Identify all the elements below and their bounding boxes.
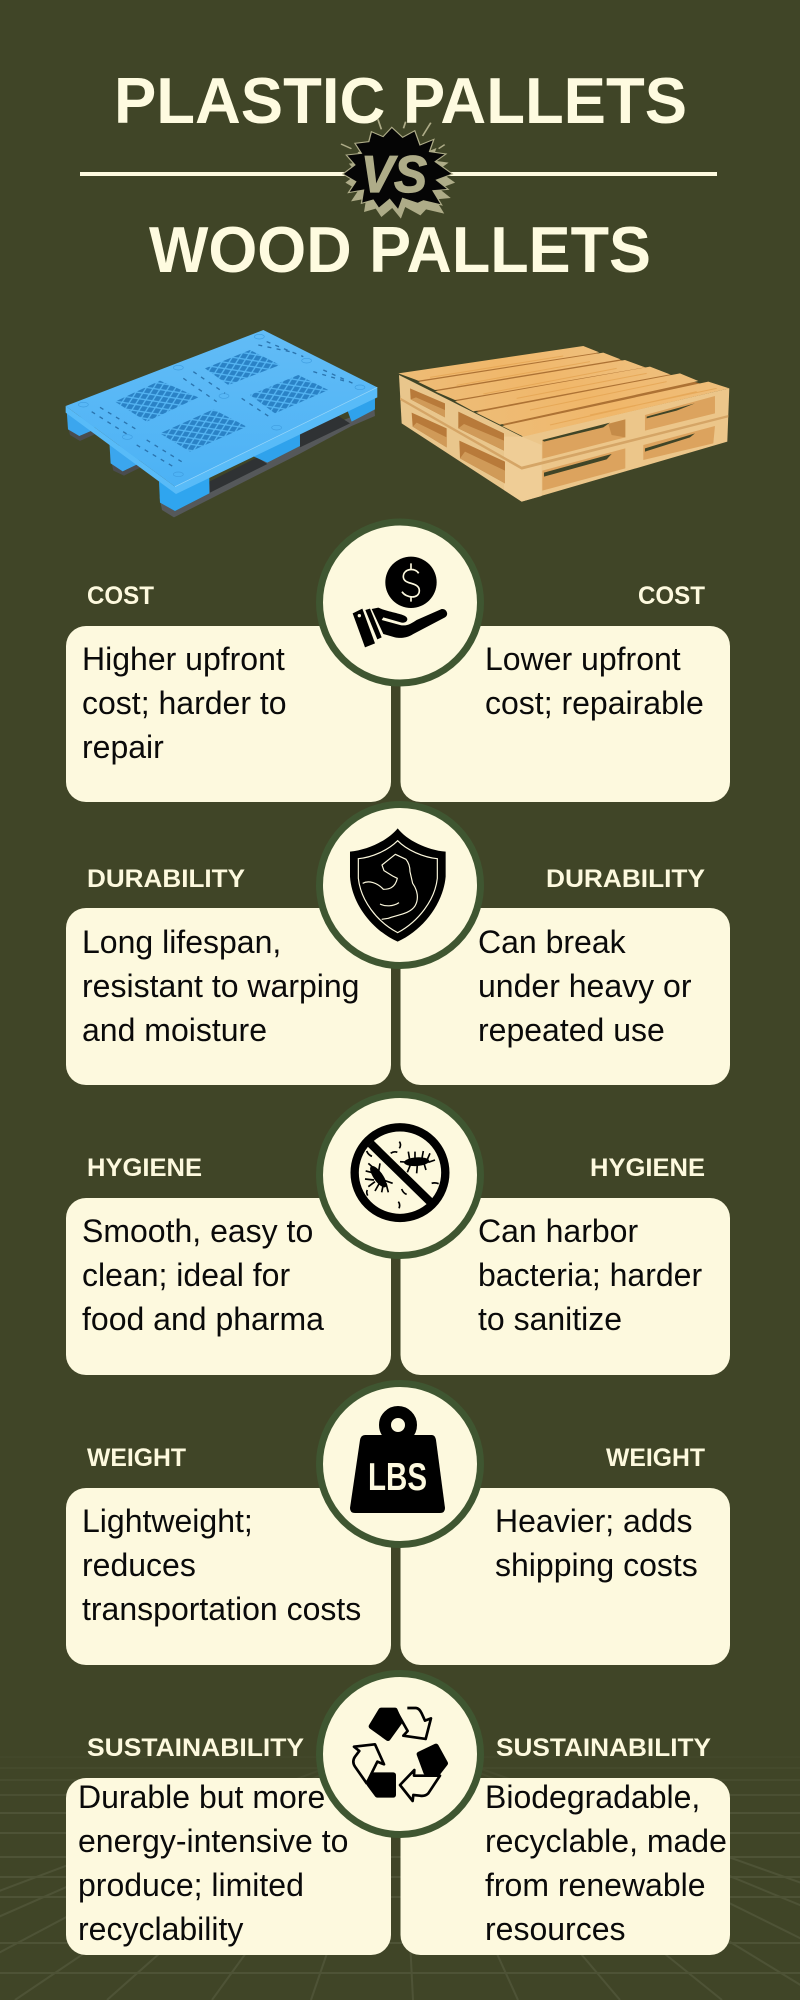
text: plastic cost: Higher upfront xyxy=(82,641,285,677)
illustration: wood pallet xyxy=(398,346,729,502)
text: wood durability: repeated use xyxy=(478,1012,665,1048)
text: wood sustainability: Biodegradable, xyxy=(485,1779,700,1815)
label: plastic weight: WEIGHT xyxy=(87,1444,186,1472)
text: plastic weight: Lightweight; xyxy=(82,1503,253,1539)
card: wood durability xyxy=(400,908,730,1085)
row: cost xyxy=(66,522,730,802)
row: durability xyxy=(66,804,730,1085)
card: plastic hygiene xyxy=(66,1198,391,1375)
text: wood durability: under heavy or xyxy=(478,968,692,1004)
text: plastic cost: cost; harder to xyxy=(82,685,287,721)
text: wood cost: cost; repairable xyxy=(485,685,704,721)
label: wood cost: COST xyxy=(638,582,705,610)
title: plastic pallets: PLASTIC PALLETS xyxy=(114,64,687,137)
icon: weight lbs: LBS xyxy=(368,1456,427,1499)
illustration: blue plastic pallet xyxy=(66,330,377,517)
icon: no bacteria xyxy=(320,1094,480,1256)
text: wood cost: Lower upfront xyxy=(485,641,681,677)
text: plastic sustainability: recyclability xyxy=(78,1911,243,1947)
text: wood durability: Can break xyxy=(478,924,627,960)
icon: hand holding coin xyxy=(320,522,480,683)
background perspective grid xyxy=(0,1740,800,2000)
text: wood hygiene: bacteria; harder xyxy=(478,1257,702,1293)
divider line right xyxy=(445,172,717,176)
row: sustainability xyxy=(66,1674,730,1955)
text: wood sustainability: recyclable, made xyxy=(485,1823,727,1859)
row: weight xyxy=(66,1384,730,1665)
card: wood cost xyxy=(400,626,730,802)
text: plastic durability: Long lifespan, xyxy=(82,924,281,960)
card: wood sustainability xyxy=(400,1778,730,1955)
text: wood sustainability: from renewable xyxy=(485,1867,706,1903)
text: plastic sustainability: produce; limited xyxy=(78,1867,304,1903)
card: plastic weight xyxy=(66,1488,391,1665)
card: plastic durability xyxy=(66,908,391,1085)
text: plastic hygiene: Smooth, easy to xyxy=(82,1213,313,1249)
row: hygiene xyxy=(66,1094,730,1375)
text: wood weight: Heavier; adds xyxy=(495,1503,692,1539)
icon: shield with arm xyxy=(320,804,480,966)
text: plastic durability: resistant to warping xyxy=(82,968,359,1004)
text: plastic weight: transportation costs xyxy=(82,1591,361,1627)
title: wood pallets: WOOD PALLETS xyxy=(149,213,651,286)
divider line left xyxy=(80,172,350,176)
icon: recycling arrows xyxy=(320,1674,480,1834)
text: wood hygiene: to sanitize xyxy=(478,1301,622,1337)
label: plastic durability: DURABILITY xyxy=(87,865,245,893)
VS burst badge xyxy=(341,119,455,219)
card: plastic cost xyxy=(66,626,391,802)
label: wood durability: DURABILITY xyxy=(546,865,705,893)
text: plastic cost: repair xyxy=(82,729,164,765)
label: wood sustainability: SUSTAINABILITY xyxy=(496,1734,711,1762)
card: wood weight xyxy=(400,1488,730,1665)
label: plastic cost: COST xyxy=(87,582,154,610)
text: wood hygiene: Can harbor xyxy=(478,1213,638,1249)
label: plastic hygiene: HYGIENE xyxy=(87,1154,202,1182)
icon: weight lbs xyxy=(320,1384,480,1544)
label: plastic sustainability: SUSTAINABILITY xyxy=(87,1734,304,1762)
VS burst badge: VS xyxy=(361,146,427,204)
label: wood weight: WEIGHT xyxy=(606,1444,705,1472)
text: plastic hygiene: clean; ideal for xyxy=(82,1257,290,1293)
label: wood hygiene: HYGIENE xyxy=(590,1154,705,1182)
text: wood sustainability: resources xyxy=(485,1911,626,1947)
text: plastic hygiene: food and pharma xyxy=(82,1301,324,1337)
text: plastic sustainability: Durable but more xyxy=(78,1779,325,1815)
card: wood hygiene xyxy=(400,1198,730,1375)
text: plastic weight: reduces xyxy=(82,1547,196,1583)
text: wood weight: shipping costs xyxy=(495,1547,698,1583)
text: plastic durability: and moisture xyxy=(82,1012,267,1048)
text: plastic sustainability: energy-intensive to xyxy=(78,1823,348,1859)
card: plastic sustainability xyxy=(66,1778,391,1955)
